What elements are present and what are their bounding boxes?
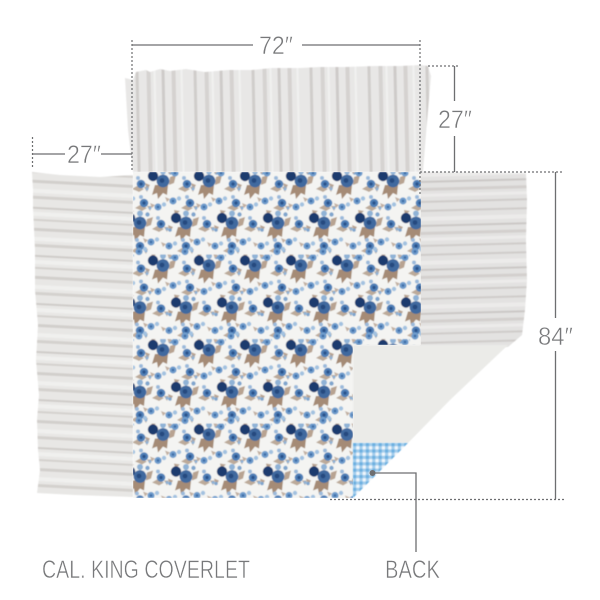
callout: back: BACK — [385, 556, 440, 584]
title: product name: CAL. KING COVERLET — [42, 556, 250, 584]
dimension: 27 inch flounce top: 27″ — [438, 106, 472, 134]
dimension: 27 inch flounce left — [32, 137, 132, 169]
dimension: 84 inch length: 84″ — [538, 323, 573, 351]
dimension: 27 inch flounce left: 27″ — [67, 141, 101, 169]
panel: top ruffle — [125, 65, 431, 172]
panel: left ruffle — [32, 172, 133, 497]
dimension: 27 inch flounce top — [420, 66, 563, 172]
panel: floral centre — [133, 172, 421, 498]
panel: right ruffle — [420, 172, 527, 347]
dimension: 72 inch width: 72″ — [259, 32, 293, 60]
panel: gingham back — [353, 443, 408, 498]
dimension: 72 inch width — [132, 32, 420, 196]
panel: folded back corner — [353, 345, 508, 443]
callout: back — [370, 470, 440, 584]
